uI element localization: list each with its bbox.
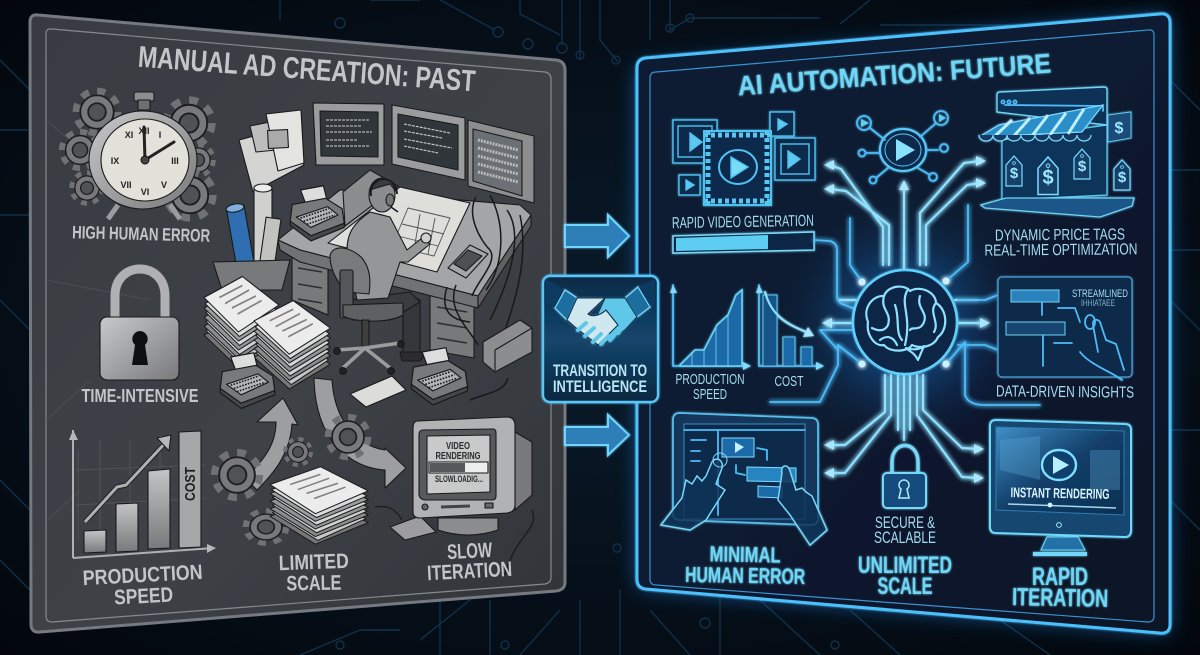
panel: ai automation future (637, 14, 1170, 633)
icon: monitor with instant rendering (990, 420, 1131, 556)
label: cost: COST (774, 373, 804, 390)
illustration: floor typewriters (220, 348, 467, 408)
label: rapid video generation: RAPID VIDEO GENERATION (672, 213, 814, 232)
icon: storefront with price tags: $ (1042, 167, 1054, 189)
icon: storefront with price tags: $ (1078, 158, 1087, 175)
label: rapid iteration: ITERATION (1012, 583, 1108, 613)
label: secure and scalable: SCALABLE (874, 528, 936, 547)
illustration: paper stacks (204, 276, 330, 389)
callout: transition to intelligence (543, 276, 658, 402)
illustration: slow CRT monitor (413, 417, 532, 535)
text: streamlined interface: IHHIATAEE (1081, 298, 1115, 308)
label: unlimited scale: UNLIMITED (858, 552, 952, 579)
illustration: wall papers (239, 110, 304, 192)
label: slow iteration: ITERATION (427, 558, 513, 585)
illustration: drafting board (328, 170, 470, 272)
panel: manual ad creation past (30, 15, 565, 632)
icon: clock with gears (64, 92, 212, 219)
illustration: desk calculator (448, 245, 488, 278)
arrow: top transition arrow (565, 215, 629, 257)
label: rapid iteration (1012, 563, 1108, 613)
illustration: paper stack (270, 467, 368, 544)
text: streamlined interface (1072, 288, 1128, 308)
icon: video film frames (673, 112, 815, 205)
label: secure and scalable: SECURE & (875, 513, 935, 532)
label: unlimited scale (858, 552, 952, 600)
label: production speed (676, 371, 744, 403)
icon: clock with gears: XII (138, 126, 150, 136)
label: rapid iteration: RAPID (1032, 563, 1088, 591)
icon: storefront with price tags: $ (1010, 165, 1019, 182)
arrow: curved down (314, 378, 406, 488)
label: dynamic price tags: DYNAMIC PRICE TAGS (995, 226, 1125, 245)
panel frame (30, 15, 565, 632)
label: slow iteration (427, 539, 513, 585)
label: slow iteration: SLOW (447, 539, 493, 564)
icon: clock with gears: XI (125, 130, 133, 140)
illustration: slow CRT monitor: SLOWLOADIG... (435, 474, 483, 484)
outer glow (637, 14, 1170, 633)
illustration: tower computer (483, 320, 532, 372)
callout text: transition to: TRANSITION TO (553, 362, 647, 380)
label: production speed: PRODUCTION (82, 561, 203, 590)
brain glow backdrop (780, 197, 1030, 447)
icon: storefront with price tags (979, 87, 1134, 217)
chart: production speed vs cost (69, 430, 216, 558)
icon: storefront with price tags: $ (1115, 120, 1124, 137)
label: limited scale: SCALE (286, 572, 342, 595)
icon: storefront with price tags: $ (1118, 169, 1127, 186)
label: production speed: PRODUCTION (676, 371, 744, 388)
label: production speed: SPEED (114, 583, 174, 610)
label: data-driven insights: DATA-DRIVEN INSIGHTS (996, 383, 1134, 402)
label: instant rendering: INSTANT RENDERING (1010, 484, 1110, 502)
icon: clock with gears: VII (120, 180, 132, 190)
label: limited scale (278, 550, 349, 595)
icon: handshake (546, 279, 655, 345)
illustration: three computer monitors (313, 103, 534, 203)
price tags (1006, 156, 1022, 186)
illustration: tangled cables (445, 195, 523, 400)
icon: clock with gears: I (159, 130, 161, 140)
title: AI AUTOMATION: FUTURE (737, 48, 1052, 101)
illustration: desk typewriter (290, 186, 344, 241)
crt text: video rendering: VIDEO (446, 441, 470, 452)
chart: production speed (670, 285, 751, 370)
panel frame (637, 14, 1170, 633)
label: production speed (82, 561, 203, 610)
text: streamlined interface: STREAMLINED (1072, 288, 1128, 300)
illustration: paper on floor (350, 376, 406, 407)
callout box (543, 276, 658, 402)
illustration: rolled blueprints (213, 184, 290, 290)
label: minimal human error: MINIMAL (709, 541, 781, 568)
arrow: curved up (245, 398, 298, 490)
progress bar (673, 232, 814, 253)
panel: streamlined interface (998, 277, 1132, 380)
illustration: office chair (330, 248, 404, 374)
label: unlimited scale: SCALE (878, 573, 932, 600)
illustration: gears (217, 419, 366, 542)
bar label: cost: COST (182, 467, 199, 501)
icon: secure padlock (883, 446, 926, 508)
label: time-intensive: TIME-INTENSIVE (82, 386, 198, 406)
label: minimal human error: HUMAN ERROR (685, 562, 805, 589)
icon: clock with gears: VI (141, 187, 149, 197)
illustration: scattered cards and cable (375, 507, 534, 575)
label: production speed: SPEED (693, 386, 727, 403)
illustration: slow CRT monitor: RENDERING (436, 451, 481, 462)
label: limited scale: LIMITED (278, 550, 349, 575)
label: minimal human error (685, 541, 805, 589)
arrow: bottom transition arrow (565, 415, 629, 455)
icon: central play node (857, 111, 948, 184)
icon: brain in glowing circle (853, 270, 957, 374)
icon: clock with gears: IX (111, 156, 119, 166)
label: real-time optimization: REAL-TIME OPTIMIZATION (984, 241, 1138, 260)
label: high human error: HIGH HUMAN ERROR (72, 222, 210, 246)
label: secure and scalable (874, 513, 936, 547)
network: glowing connections and arrows (770, 156, 1040, 483)
icon: tablet with touching hands (661, 413, 827, 545)
callout text: intelligence: INTELLIGENCE (553, 378, 647, 396)
illustration: desk (278, 190, 531, 358)
chart: cost (756, 285, 824, 370)
icon: clock with gears: V (161, 180, 167, 190)
icon: padlock (100, 269, 179, 380)
illustration: person at the desk (347, 178, 431, 361)
icon: clock with gears: III (171, 156, 179, 166)
title: MANUAL AD CREATION: PAST (137, 41, 476, 98)
